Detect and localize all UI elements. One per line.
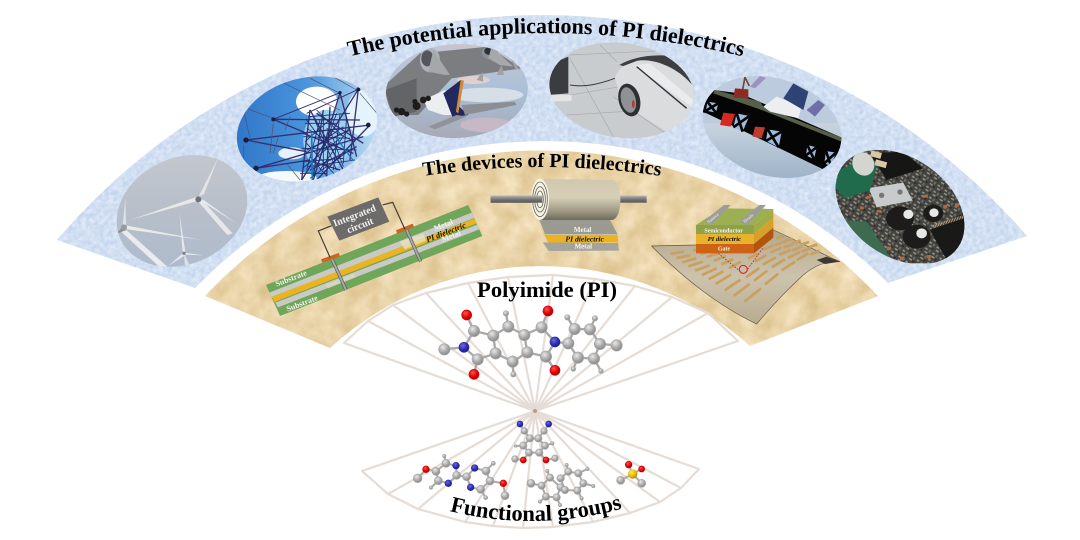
integrated circuit box — [327, 197, 389, 241]
photo: wind turbines — [116, 155, 248, 267]
transistor labels: Source — [707, 213, 720, 225]
stack labels — [274, 217, 467, 314]
fan: functional groups spokes — [362, 411, 699, 528]
capacitor labels: Metal — [574, 226, 591, 234]
panel: potential applications band — [57, 15, 1027, 288]
capacitor labels: Metal — [575, 243, 592, 251]
device: wound film capacitor — [491, 179, 647, 251]
heading: functional groups: Functional groups — [450, 496, 622, 524]
capacitor labels: PI dielectric — [565, 234, 604, 243]
transistor labels — [704, 213, 755, 253]
flexible sheet with electrode array — [652, 230, 840, 324]
heading: devices: The devices of PI dielectrics — [422, 152, 661, 176]
stack labels: Metal — [432, 217, 455, 233]
molecule: functional groups — [413, 421, 646, 507]
transistor labels: Semiconductor — [704, 229, 743, 235]
capacitor labels — [565, 226, 604, 251]
stack labels: PI dielectric — [425, 221, 467, 244]
icon: orange contacts — [322, 225, 413, 261]
integrated circuit box: circuit — [345, 216, 376, 236]
fan: polyimide spokes — [344, 275, 738, 411]
transistor labels: PI dielectric — [708, 236, 741, 243]
photo: aircraft — [383, 42, 532, 142]
panel: devices band — [205, 151, 878, 348]
heading: potential applications: The potential applications of PI dielectrics — [346, 18, 744, 56]
device: flexible transistor — [652, 205, 840, 324]
icon: wiring — [318, 202, 405, 257]
stack labels: Substrate — [285, 293, 319, 314]
transistor labels: Drain — [743, 213, 755, 225]
photo: transmission tower — [233, 73, 380, 186]
photo: circuit board — [830, 148, 970, 263]
transistor stack — [696, 205, 773, 273]
heading: polyimide: Polyimide (PI) — [477, 277, 617, 302]
icon: via highlights — [332, 230, 421, 290]
photo: electric car charging — [547, 40, 697, 140]
integrated circuit box: Integrated — [332, 203, 378, 229]
stack labels: Metal — [440, 228, 463, 244]
icon: via connectors — [332, 230, 421, 290]
photo: offshore platform — [702, 76, 842, 178]
transistor labels: Gate — [718, 247, 730, 253]
stack labels: Substrate — [274, 268, 308, 289]
molecule: polyimide — [439, 306, 622, 379]
device: integrated circuit substrate stack — [266, 197, 482, 316]
fan pivot — [533, 409, 537, 413]
